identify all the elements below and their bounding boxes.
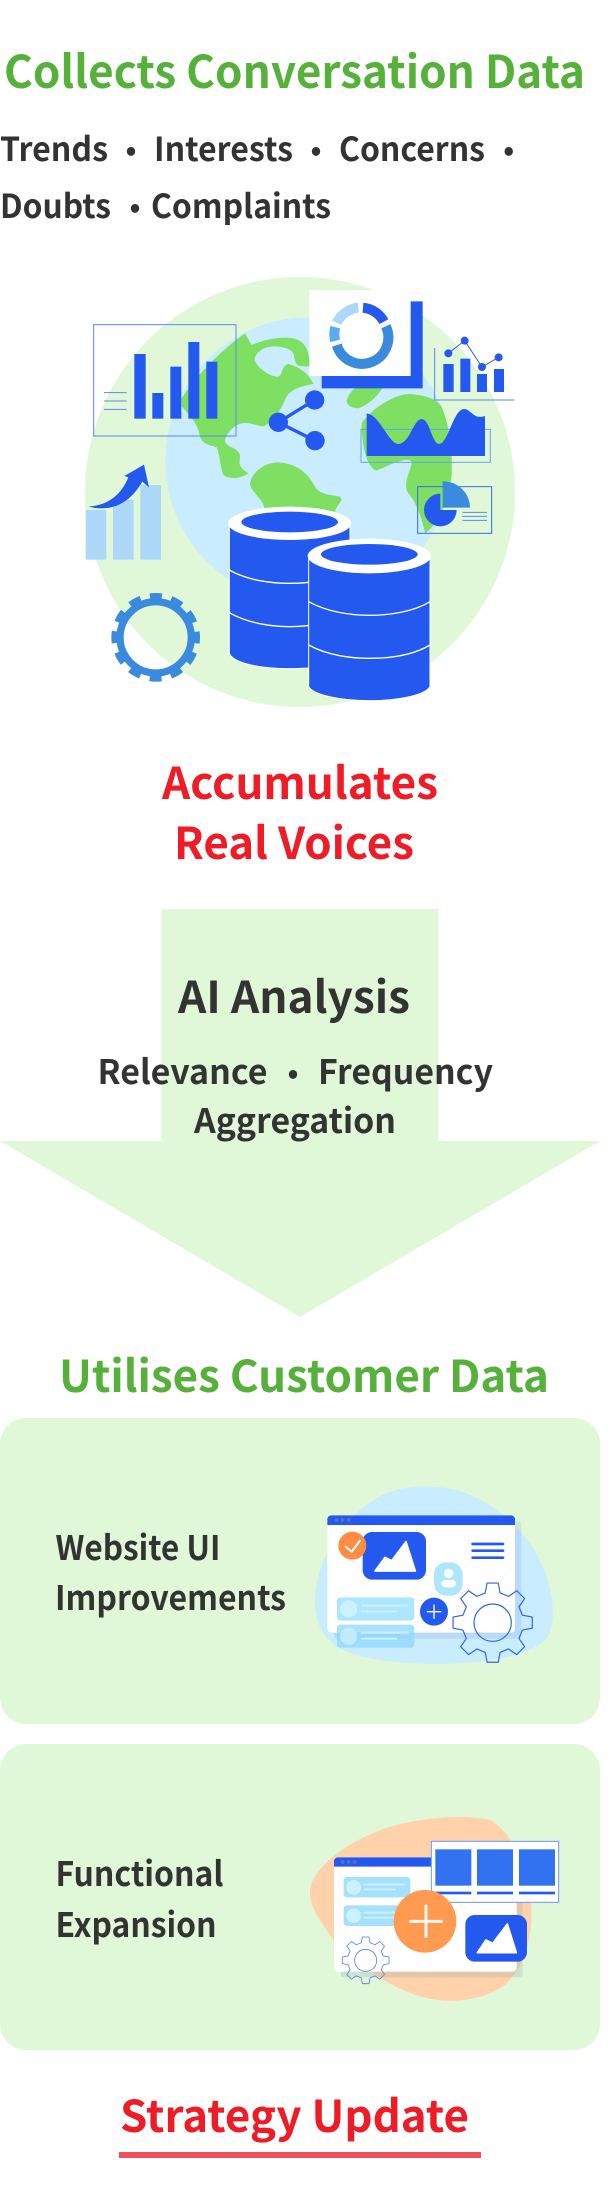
illustration: window with plus and grid [310, 1817, 559, 2001]
heading: utilises customer data: Utilises Customer Data [59, 1341, 549, 1405]
illustration: globe with data charts and databases [85, 277, 515, 707]
text block: data types: Doubts [0, 180, 111, 228]
title: collects conversation data: Collects Conversation Data [4, 36, 585, 101]
text block: analysis methods [98, 1045, 493, 1143]
panel: website UI improvements [0, 1418, 600, 1724]
text block: data types: Complaints [151, 180, 331, 228]
icon: back database cylinder [228, 507, 351, 669]
text block: data types: Concerns [339, 123, 485, 171]
heading: accumulates real voices [161, 748, 438, 872]
panel: functional expansion [0, 1744, 600, 2050]
text block: analysis methods: Relevance [98, 1045, 268, 1094]
text block: functional expansion label: Expansion [56, 1898, 216, 1947]
heading: accumulates real voices: Accumulates [161, 748, 438, 812]
arrow: down arrow background [0, 909, 600, 1317]
text block: website UI improvements label [55, 1521, 286, 1620]
text block: data types: Interests [154, 123, 293, 171]
icon: rising bars with arrow [86, 465, 161, 560]
illustration: website window with gear [315, 1487, 553, 1664]
icon: share nodes [269, 390, 325, 450]
icon: bar chart frame [94, 325, 236, 436]
text block: analysis methods: Aggregation [193, 1094, 396, 1143]
text block: data types: • [503, 127, 514, 169]
text block: data types: • [130, 184, 140, 226]
icon: front database cylinder [308, 539, 431, 701]
text block: functional expansion label [56, 1847, 224, 1947]
underline: strategy update [119, 2152, 481, 2158]
icon: pie chart card [418, 481, 492, 533]
heading: strategy update: Strategy Update [120, 2081, 469, 2145]
icon: donut chart card [309, 290, 423, 388]
heading: AI analysis: AI Analysis [177, 962, 410, 1026]
text block: analysis methods: • [288, 1050, 298, 1092]
icon: gear [114, 596, 197, 679]
text block: data types: Trends [0, 123, 108, 171]
text block: analysis methods: Frequency [318, 1045, 493, 1094]
text block: data types [0, 123, 514, 228]
icon: continents [182, 333, 452, 533]
icon: area chart [361, 409, 490, 462]
text block: website UI improvements label: Improvements [55, 1571, 286, 1620]
text block: data types: • [311, 127, 321, 169]
icon: small combo chart [435, 337, 514, 400]
text block: website UI improvements label: Website UI [56, 1521, 220, 1570]
text block: functional expansion label: Functional [56, 1847, 224, 1896]
text block: data types: • [126, 127, 136, 169]
heading: accumulates real voices: Real Voices [174, 808, 414, 872]
